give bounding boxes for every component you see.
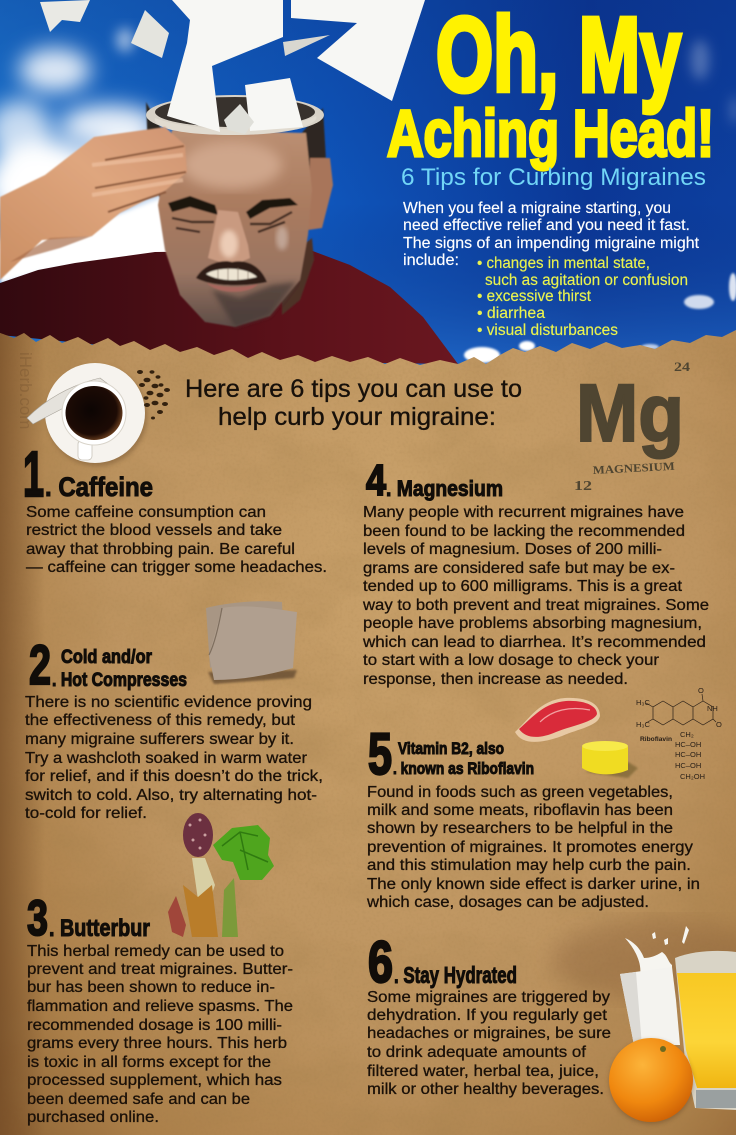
body 2: There is no scientific evidence proving xyxy=(25,694,312,711)
tip 3: butterbur xyxy=(27,890,293,1126)
orange xyxy=(609,1038,693,1124)
icon: riboflavin molecule: H₃C xyxy=(636,698,650,707)
heading 6 xyxy=(368,930,517,995)
heading 1: . Caffeine xyxy=(45,472,153,502)
heading 1: 1 xyxy=(23,438,44,510)
body 4: been found to be lacking the recommended xyxy=(363,523,685,540)
intro text: need effective relief and you need it fast. xyxy=(403,217,690,234)
body 3: is toxic in all forms except for the xyxy=(27,1054,271,1071)
torn paper background xyxy=(0,330,736,1135)
body 5: prevention of migraines. It promotes energy xyxy=(367,839,693,856)
intro text: include: xyxy=(403,252,459,269)
icon: riboflavin molecule: O xyxy=(698,686,704,695)
icon: magnesium periodic symbol: MAGNESIUM xyxy=(593,461,675,477)
head ring with open skull xyxy=(146,95,324,135)
subtitle: 6 Tips for Curbing Migraines xyxy=(401,164,706,191)
heading 4: . Magnesium xyxy=(386,476,503,501)
icon: riboflavin molecule xyxy=(636,686,722,781)
icon: riboflavin molecule: HC–OH xyxy=(675,750,701,759)
icon: magnesium periodic symbol: Mg xyxy=(576,368,684,459)
heading 2: 2 xyxy=(29,633,51,696)
body 5: Found in foods such as green vegetables, xyxy=(367,784,673,801)
icon: magnesium periodic symbol xyxy=(574,359,691,494)
body 1: — caffeine can trigger some headaches. xyxy=(26,559,327,576)
body 4: levels of magnesium. Doses of 200 milli- xyxy=(363,541,662,558)
body 2: the effectiveness of this remedy, but xyxy=(25,712,296,729)
tip 6: stay hydrated xyxy=(367,930,611,1098)
body 3: prevent and treat migraines. Butter- xyxy=(27,961,293,978)
clenched mouth xyxy=(196,261,267,292)
icon: butterbur plant xyxy=(168,813,274,937)
heading 5: 5 xyxy=(368,722,392,787)
heading 2: Cold and/or xyxy=(61,647,153,668)
heading 5: Vitamin B2, also xyxy=(398,740,504,758)
body 1: away that throbbing pain. Be careful xyxy=(26,541,295,558)
body 4 xyxy=(362,504,709,688)
heading 4 xyxy=(366,456,503,505)
body 6: filtered water, herbal tea, juice, xyxy=(367,1063,599,1080)
watermark: iHerb.com xyxy=(16,352,35,429)
icon: magnesium periodic symbol: 12 xyxy=(574,479,592,494)
heading 6: . Stay Hydrated xyxy=(394,962,517,988)
tip 5: vitamin B2 riboflavin xyxy=(366,722,700,911)
body 3: This herbal remedy can be used to xyxy=(27,943,284,960)
section heading: help curb your migraine: xyxy=(218,403,496,431)
icon: coffee cup xyxy=(27,363,170,466)
body 6: milk or other healthy beverages. xyxy=(367,1081,604,1098)
symptoms list: such as agitation or confusion xyxy=(485,272,688,289)
body 5: and this stimulation may help curb the pain. xyxy=(367,857,691,874)
body 2: switch to cold. Also, try alternating hot- xyxy=(25,787,317,804)
intro text xyxy=(403,200,700,269)
milk glass and splash xyxy=(620,926,689,1046)
section heading: Here are 6 tips you can use to xyxy=(185,375,522,403)
icon: folded towel xyxy=(206,601,297,684)
body 1: Some caffeine consumption can xyxy=(26,504,266,521)
body 4: which can lead to diarrhea. It’s recommended xyxy=(362,634,706,651)
icon: riboflavin molecule: HC–OH xyxy=(675,761,701,770)
sky background xyxy=(0,0,736,370)
body 3: recommended dosage is 100 milli- xyxy=(27,1017,282,1034)
heading 4: 4 xyxy=(366,456,386,505)
icon: riboflavin molecule: Riboflavin xyxy=(640,736,672,743)
tip 4: magnesium xyxy=(362,456,709,688)
body 6: Some migraines are triggered by xyxy=(367,989,610,1006)
body 3: bur has been shown to reduce in- xyxy=(27,979,275,996)
title xyxy=(387,0,714,170)
body 4: Many people with recurrent migraines have xyxy=(363,504,684,521)
icon: riboflavin molecule: NH xyxy=(707,704,718,713)
icon: magnesium periodic symbol: 24 xyxy=(674,359,691,374)
icon: riboflavin molecule: CH₂OH xyxy=(680,772,705,781)
heading 5 xyxy=(368,722,534,787)
body 3: grams every three hours. This herb xyxy=(27,1035,287,1052)
heading 3: . Butterbur xyxy=(49,915,150,942)
section heading xyxy=(185,375,522,431)
body 2: for relief, and if this doesn’t do the trick, xyxy=(25,768,323,785)
symptoms list: • changes in mental state, xyxy=(477,255,650,272)
icon: coffee beans xyxy=(137,370,170,420)
tip 1: caffeine xyxy=(23,438,327,576)
heading 3 xyxy=(27,890,150,946)
symptoms list: • diarrhea xyxy=(477,305,545,322)
icon: riboflavin molecule: CH₂ xyxy=(680,730,694,739)
body 4: tended up to 600 milligrams. This is a great xyxy=(363,578,683,595)
body 1 xyxy=(26,504,327,576)
body 3: flammation and relieve spasms. The xyxy=(27,998,293,1015)
body 1: restrict the blood vessels and take xyxy=(26,522,282,539)
icon: riboflavin molecule: O xyxy=(716,720,722,729)
body 3: purchased online. xyxy=(27,1109,159,1126)
hero photo panel: sky, man and paper xyxy=(0,0,736,370)
body 4: to start with a low dosage to check your xyxy=(363,652,660,669)
body 6: headaches or migraines, be sure xyxy=(367,1025,611,1042)
intro text: The signs of an impending migraine might xyxy=(403,235,700,252)
body 5 xyxy=(366,784,700,911)
hand on forehead xyxy=(0,127,187,280)
body 2: to-cold for relief. xyxy=(25,805,147,822)
body 4: response, then increase as needed. xyxy=(363,671,628,688)
illustration: milk, juice and orange xyxy=(609,926,736,1124)
juice glass xyxy=(675,951,736,1110)
tip 2: cold and hot compresses xyxy=(25,633,323,822)
heading 2: . Hot Compresses xyxy=(52,670,187,691)
icon: steak xyxy=(515,698,600,742)
heading 5: . known as Riboflavin xyxy=(393,760,534,778)
body 2: many migraine sufferers swear by it. xyxy=(25,731,294,748)
body 5: which case, dosages can be adjusted. xyxy=(366,894,649,911)
body 5: shown by researchers to be helpful in the xyxy=(367,820,673,837)
heading 2 xyxy=(29,633,187,696)
symptoms list: • excessive thirst xyxy=(477,288,592,305)
body 4: people have problems absorbing magnesium, xyxy=(363,615,702,632)
symptoms list xyxy=(477,255,688,339)
icon: riboflavin molecule: H₃C xyxy=(636,720,650,729)
body 6: dehydration. If you regularly get xyxy=(367,1007,608,1024)
body 4: grams are considered safe but may be ex- xyxy=(363,560,675,577)
body 6: to drink adequate amounts of xyxy=(367,1044,587,1061)
heading 6: 6 xyxy=(368,930,393,995)
body 2: Try a washcloth soaked in warm water xyxy=(25,750,308,767)
body 3: been deemed safe and can be xyxy=(27,1091,250,1108)
icon: cheese xyxy=(582,741,638,778)
man's head and grimacing face xyxy=(146,102,333,327)
flying paper sheets xyxy=(40,0,425,134)
body 2 xyxy=(25,694,323,822)
body 5: milk and some meats, riboflavin has been xyxy=(367,802,673,819)
body 3 xyxy=(27,943,293,1126)
body 3: processed supplement, which has xyxy=(27,1072,282,1089)
intro text: When you feel a migraine starting, you xyxy=(403,200,671,217)
heading 1 xyxy=(23,438,153,510)
body 5: The only known side effect is darker urine, in xyxy=(367,876,700,893)
body 6 xyxy=(367,989,611,1098)
heading 3: 3 xyxy=(27,890,48,946)
symptoms list: • visual disturbances xyxy=(477,322,618,339)
body 4: way to both prevent and treat migraines. Some xyxy=(362,597,709,614)
icon: riboflavin molecule: HC–OH xyxy=(675,740,701,749)
man's shirt xyxy=(0,250,458,364)
